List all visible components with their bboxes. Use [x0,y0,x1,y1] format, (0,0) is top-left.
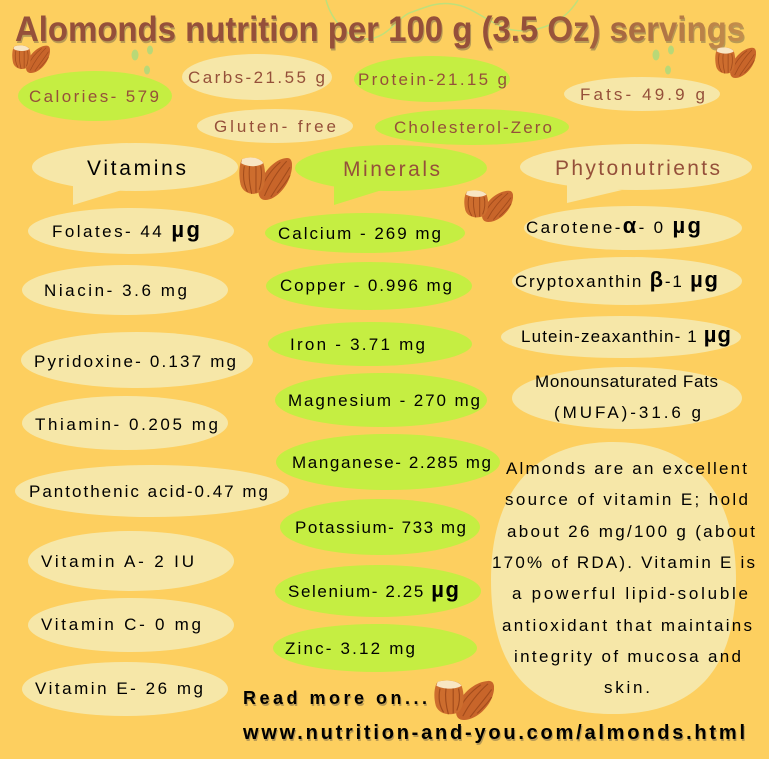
callout: vitamin e note: integrity of mucosa and [514,647,741,666]
heading: vitamins [32,143,238,205]
callout: vitamin e note: antioxidant that maintains [502,616,752,635]
callout: vitamin e note: a powerful lipid-soluble [512,584,748,603]
zinc [273,624,477,672]
summary: gluten [197,109,353,143]
mufa: Monounsaturated Fats [535,372,718,391]
zinc: Zinc- 3.12 mg [285,639,415,658]
potassium: Potassium- 733 mg [295,518,466,537]
vitamin a: Vitamin A- 2 IU [41,552,194,571]
vitamin c: Vitamin C- 0 mg [41,615,201,634]
carotene [524,206,742,250]
vitamin e: Vitamin E- 26 mg [35,679,203,698]
heading: minerals: Minerals [343,158,440,181]
summary: fats: Fats- 49.9 g [580,85,705,104]
summary: calories [18,71,172,121]
vitamin e [22,662,228,716]
lutein-zeaxanthin [501,316,741,358]
mufa: (MUFA)-31.6 g [554,403,701,422]
panel: phytonutrients list [501,206,742,429]
selenium: Selenium- 2.25 µg [288,577,459,602]
source url: www.nutrition-and-you.com/almonds.html [242,722,745,744]
panel: vitamins list [15,208,289,716]
summary: carbs [182,54,332,100]
callout: vitamin e note: source of vitamin E; hold [505,490,748,509]
thiamin [22,396,228,450]
pyridoxine: Pyridoxine- 0.137 mg [34,352,236,371]
copper [266,262,472,310]
heading: minerals [295,145,487,205]
summary: protein [354,56,510,102]
callout: vitamin e note [491,442,755,714]
thiamin: Thiamin- 0.205 mg [35,415,218,434]
pantothenic acid [15,465,289,517]
summary: carbs: Carbs-21.55 g [188,68,325,87]
manganese: Manganese- 2.285 mg [292,453,491,472]
callout: vitamin e note: skin. [604,678,650,697]
decorative green dots [132,46,674,74]
iron: Iron - 3.71 mg [290,335,425,354]
title: Alomonds nutrition per 100 g (3.5 Oz) servings [15,10,745,49]
pyridoxine [21,332,253,388]
selenium [275,565,481,617]
iron [268,322,472,366]
carotene: Carotene-α- 0 µg [526,213,701,238]
niacin [22,265,228,315]
folates [28,208,234,254]
niacin: Niacin- 3.6 mg [44,281,187,300]
potassium [280,499,480,555]
calcium [265,213,465,253]
callout: vitamin e note: 170% of RDA). Vitamin E is [492,553,755,572]
magnesium: Magnesium - 270 mg [288,391,480,410]
heading: phytonutrients [520,144,752,203]
vitamin a [28,531,234,591]
cryptoxanthin [512,257,742,305]
icon: almonds top left [12,45,50,73]
copper: Copper - 0.996 mg [280,276,452,295]
cryptoxanthin: Cryptoxanthin β-1 µg [515,267,718,292]
summary: protein: Protein-21.15 g [358,70,507,89]
summary: cholesterol: Cholesterol-Zero [394,118,552,137]
pantothenic acid: Pantothenic acid-0.47 mg [29,482,268,501]
summary: fats [564,77,720,111]
lutein-zeaxanthin: Lutein-zeaxanthin- 1 µg [521,322,731,347]
heading: phytonutrients: Phytonutrients [555,157,720,180]
summary: cholesterol [375,109,569,145]
panel: minerals list [265,213,500,672]
icon: almonds by minerals [464,190,513,222]
decorative green curve [326,0,578,39]
calcium: Calcium - 269 mg [278,224,441,243]
vitamin c [28,598,234,652]
callout: vitamin e note: Almonds are an excellent [506,459,747,478]
icon: almonds top right [715,47,756,78]
manganese [276,434,500,490]
heading: vitamins: Vitamins [87,157,186,180]
callout: vitamin e note: about 26 mg/100 g (about [507,522,755,541]
magnesium [275,373,487,427]
summary: calories: Calories- 579 [29,87,159,106]
read more text: Read more on... [243,688,427,708]
mufa [512,367,742,429]
folates: Folates- 44 µg [52,217,200,242]
icon: almonds by read more [434,680,494,720]
summary: gluten: Gluten- free [214,117,336,136]
icon: almonds by vitamins [239,157,292,200]
